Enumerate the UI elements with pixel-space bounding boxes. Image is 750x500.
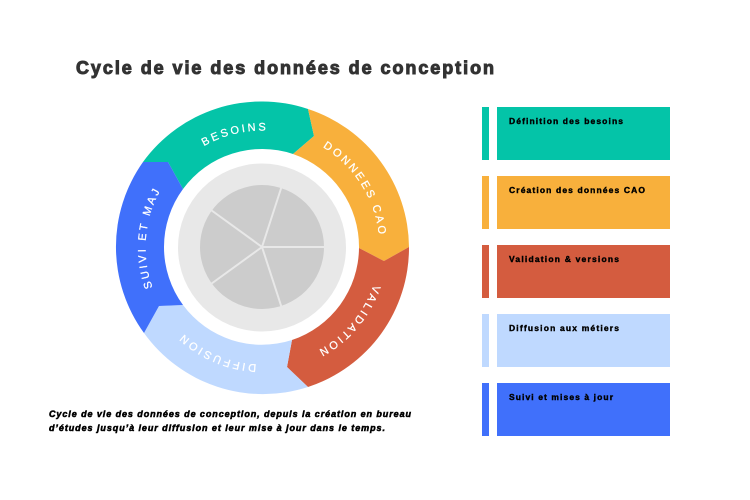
card: diffusion aux métiers bbox=[482, 314, 670, 367]
segment: suivi et maj: SUIVI ET MAJ bbox=[138, 188, 159, 289]
card: diffusion aux métiers: Diffusion aux métiers bbox=[509, 323, 619, 333]
card: validation et versions bbox=[482, 245, 670, 298]
segment: données CAO: DONNEES CAO bbox=[323, 141, 386, 234]
segment: besoins bbox=[143, 102, 314, 189]
cycle diagram bbox=[116, 102, 409, 394]
caption: Cycle de vie des données de conception, depuis la création en bureau bbox=[49, 409, 411, 419]
segment: suivi et maj bbox=[116, 162, 183, 333]
caption: d’études jusqu’à leur diffusion et leur mise à jour dans le temps. bbox=[49, 423, 385, 433]
card: création des données CAO bbox=[482, 176, 670, 229]
card: suivi et mises à jour: Suivi et mises à jour bbox=[509, 392, 614, 402]
card: suivi et mises à jour bbox=[482, 383, 670, 436]
title: Cycle de vie des données de conception bbox=[76, 58, 494, 78]
segment: données CAO bbox=[293, 109, 409, 261]
card: définition des besoins: Définition des besoins bbox=[509, 116, 623, 126]
card: création des données CAO: Création des données CAO bbox=[509, 185, 645, 195]
card: validation et versions: Validation & versions bbox=[509, 254, 619, 264]
segment: validation bbox=[287, 247, 409, 387]
segment: diffusion: DIFFUSION bbox=[180, 334, 256, 372]
segment: validation: VALIDATION bbox=[320, 287, 381, 356]
card: définition des besoins bbox=[482, 107, 670, 160]
caption bbox=[49, 409, 411, 433]
segment: besoins: BESOINS bbox=[201, 122, 266, 146]
segment: diffusion bbox=[144, 305, 308, 394]
central pie bbox=[178, 164, 346, 332]
